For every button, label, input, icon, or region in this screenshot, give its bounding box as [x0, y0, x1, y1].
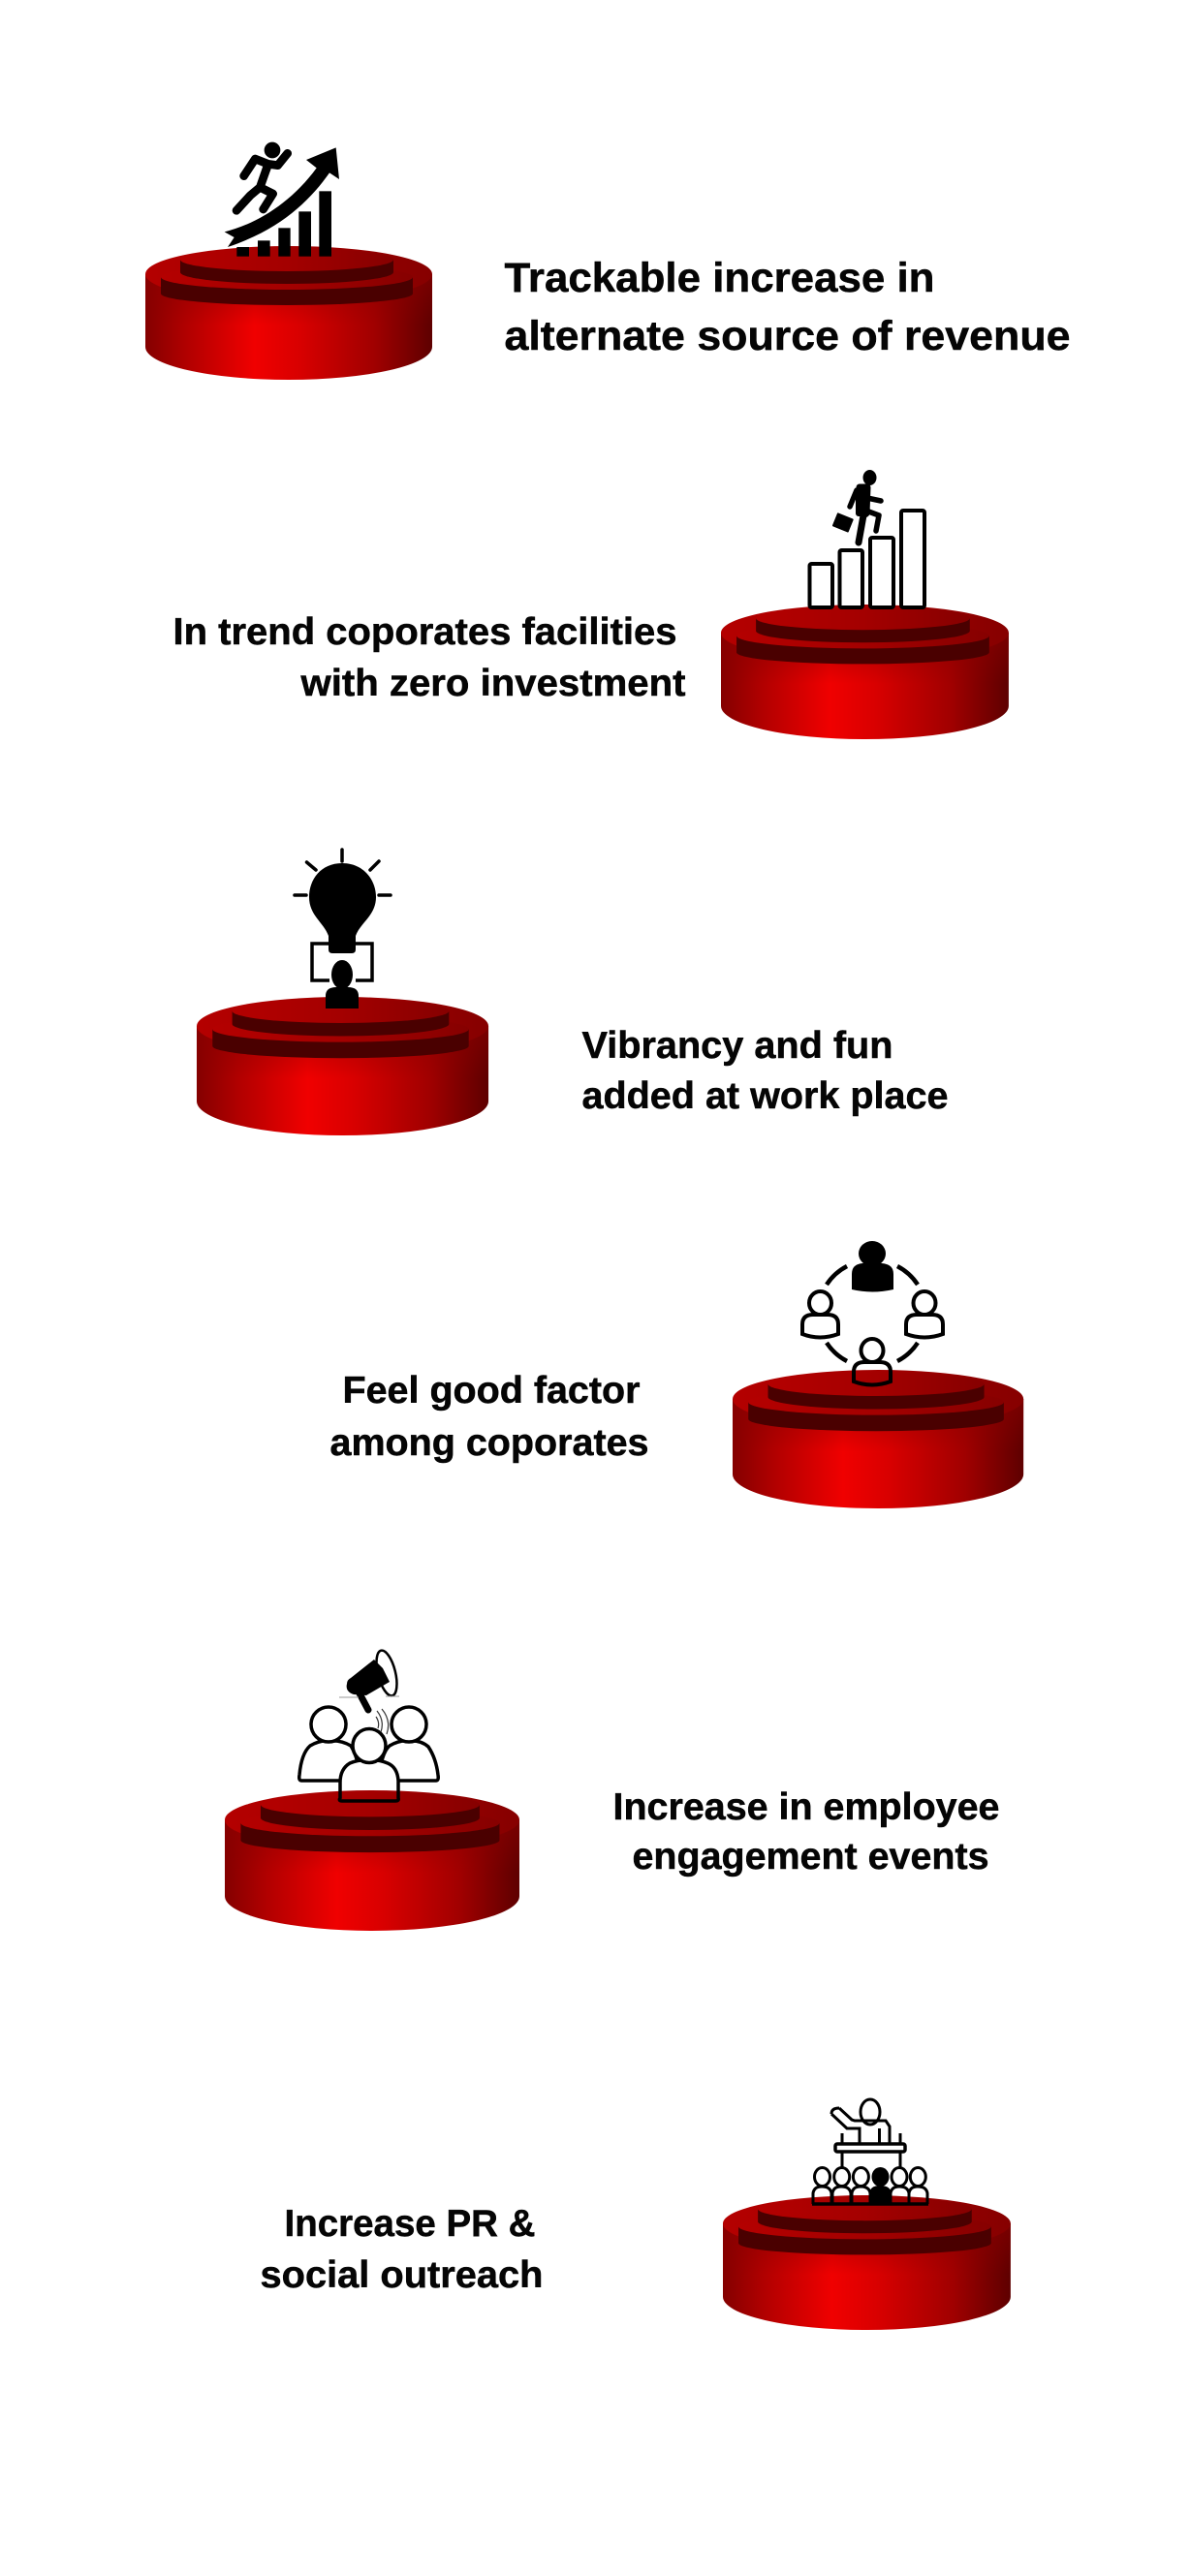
text: feel good factor: [329, 1370, 649, 1464]
podium 2: [721, 605, 1009, 739]
text: increase PR: [260, 2203, 543, 2296]
podium 1: [145, 246, 432, 380]
panel: feel good factor: [329, 1241, 1023, 1508]
panel: PR and outreach: [260, 2099, 1011, 2330]
text: vibrancy and fun: Vibrancy and fun: [581, 1025, 893, 1067]
text: trackable increase: [504, 255, 1070, 359]
text: increase PR: Increase PR &: [285, 2203, 535, 2245]
podium 6: [723, 2195, 1011, 2330]
text: vibrancy and fun: added at work place: [581, 1075, 948, 1117]
text: in trend facilities: with zero investment: [299, 663, 686, 704]
text: increase in employee: Increase in employee: [612, 1786, 1000, 1828]
icon: megaphone and team: [299, 1649, 438, 1801]
text: trackable increase: alternate source of revenue: [504, 313, 1070, 359]
icon: speaker at lectern with audience: [812, 2099, 928, 2204]
text: in trend facilities: In trend coporates facilities: [172, 611, 676, 653]
podium 3: [197, 997, 488, 1135]
text: vibrancy and fun: [581, 1025, 948, 1117]
text: trackable increase: Trackable increase in: [504, 255, 934, 301]
panel: employee engagement: [225, 1649, 1000, 1931]
text: increase PR: social outreach: [260, 2254, 543, 2296]
podium 5: [225, 1790, 519, 1931]
icon: circle of people: [802, 1241, 943, 1385]
icon: lightbulb over person: [295, 850, 391, 1009]
text: increase in employee: engagement events: [632, 1836, 988, 1878]
text: feel good factor: Feel good factor: [343, 1370, 640, 1412]
panel: trackable revenue: [145, 142, 1070, 380]
podium 4: [733, 1370, 1023, 1508]
icon: climbing bar chart: [810, 470, 924, 607]
text: increase in employee: [612, 1786, 1000, 1878]
icon: runner on rising chart: [225, 142, 339, 257]
panel: vibrancy: [197, 850, 948, 1135]
text: feel good factor: among coporates: [329, 1422, 649, 1464]
text: in trend facilities: [172, 611, 686, 704]
panel: corporate facilities: [172, 470, 1009, 739]
